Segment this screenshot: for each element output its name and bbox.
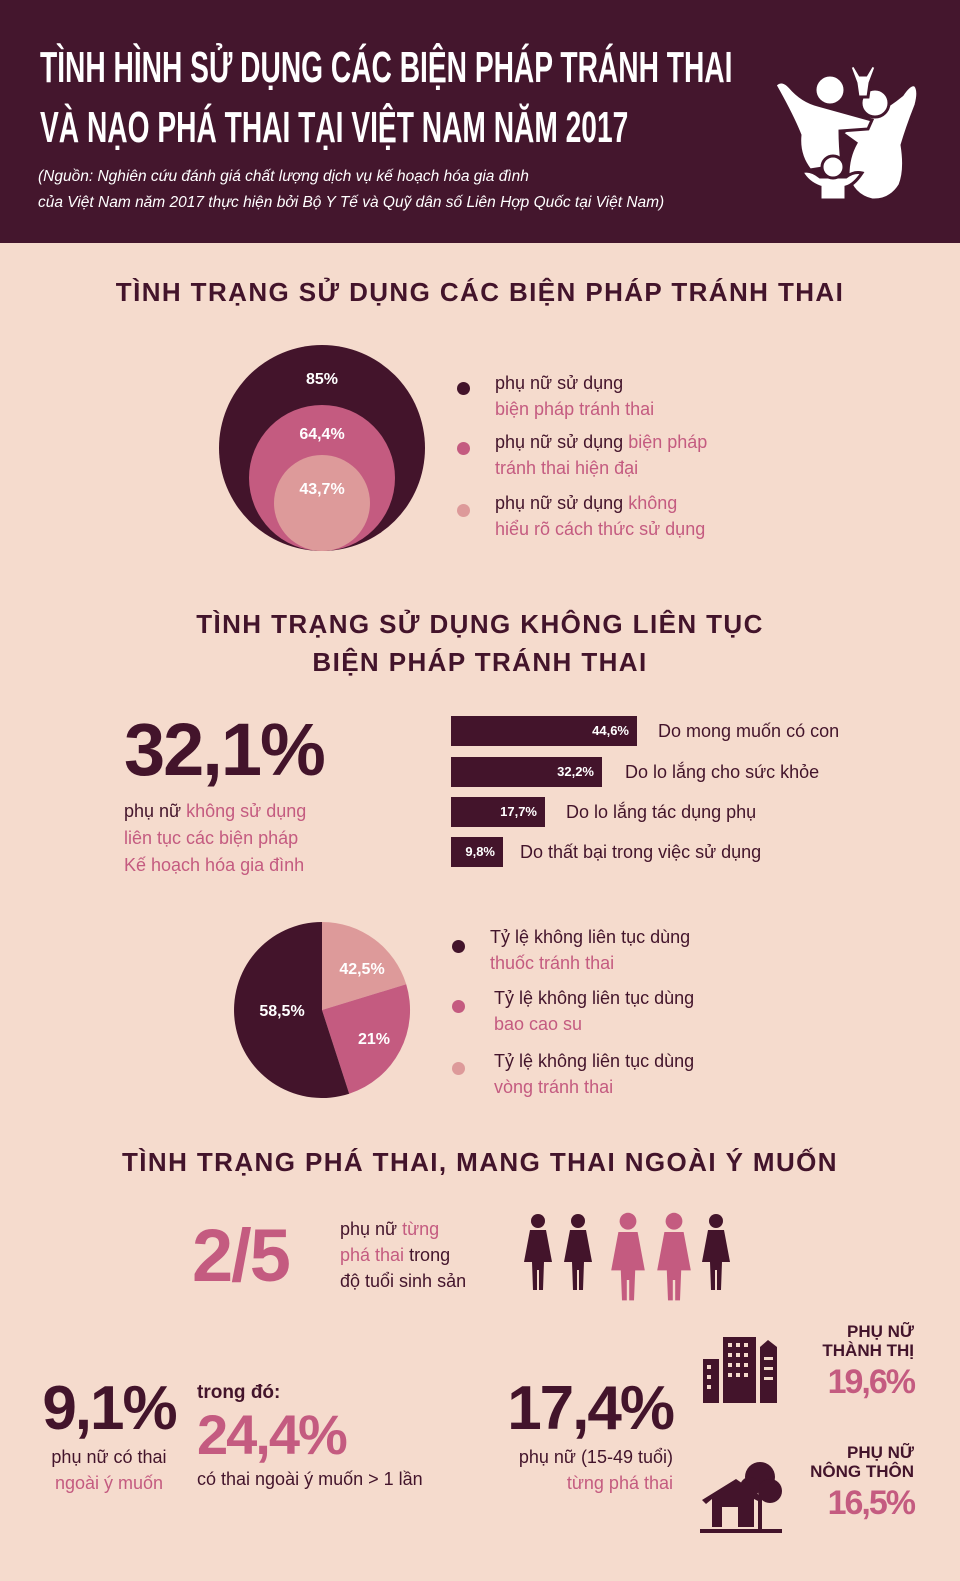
legend: pie: thuốc tránh thai	[490, 953, 614, 973]
stat: 32,1%	[124, 708, 324, 875]
stat: 24,4%: 24,4%	[197, 1403, 346, 1466]
source: của Việt Nam năm 2017 thực hiện bởi Bộ Y Tế và Quỹ dân số Liên Hợp Quốc tại Việt Nam)	[38, 194, 664, 211]
chart: nested circles: 64,4%	[299, 426, 345, 443]
legend: pie: Tỷ lệ không liên tục dùng	[490, 927, 690, 947]
stat: 32,1%: phụ nữ không sử dụng	[124, 801, 306, 821]
bar chart: reasons: Do mong muốn có con	[658, 721, 839, 741]
bar chart: reasons: 32,2%	[557, 764, 594, 779]
stat: 24,4%: có thai ngoài ý muốn > 1 lần	[197, 1469, 423, 1489]
source	[38, 168, 664, 211]
legend: pie: bao cao su	[494, 1014, 582, 1034]
legend: circles: phụ nữ sử dụng biện pháp	[495, 432, 707, 452]
legend: circles: phụ nữ sử dụng	[495, 373, 623, 393]
stat: rural: NÔNG THÔN	[810, 1462, 914, 1481]
text: 2/5: độ tuổi sinh sản	[340, 1271, 466, 1291]
stat: 24,4%: trong đó:	[197, 1382, 280, 1403]
legend: pie: Tỷ lệ không liên tục dùng	[494, 1051, 694, 1071]
heading: abortion: TÌNH TRẠNG PHÁ THAI, MANG THAI NGOÀI Ý MUỐN	[122, 1147, 838, 1177]
title: VÀ NẠO PHÁ THAI TẠI VIỆT NAM NĂM 2017	[40, 103, 628, 152]
pie chart	[234, 922, 410, 1098]
bar chart: reasons: 9,8%	[465, 844, 495, 859]
chart: nested circles	[219, 345, 425, 551]
bar chart: reasons: 44,6%	[592, 723, 629, 738]
stat: 17,4%	[507, 1374, 674, 1493]
stat: 9,1%: 9,1%	[42, 1374, 176, 1443]
icon: women	[524, 1212, 730, 1300]
heading: contraception usage: TÌNH TRẠNG SỬ DỤNG CÁC BIỆN PHÁP TRÁNH THAI	[116, 277, 844, 307]
stat: 9,1%: phụ nữ có thai	[51, 1447, 167, 1467]
heading: discontinued usage: TÌNH TRẠNG SỬ DỤNG KHÔNG LIÊN TỤC	[196, 609, 764, 639]
source: (Nguồn: Nghiên cứu đánh giá chất lượng dịch vụ kế hoạch hóa gia đình	[38, 168, 529, 185]
header	[0, 0, 960, 243]
legend: circles: hiểu rõ cách thức sử dụng	[495, 519, 705, 539]
bar chart: reasons: Do thất bại trong việc sử dụng	[520, 842, 761, 862]
heading: discontinued usage	[196, 609, 764, 677]
title	[40, 43, 732, 152]
text: 2/5: phụ nữ từng	[340, 1219, 439, 1239]
text: 2/5	[340, 1219, 466, 1291]
title: TÌNH HÌNH SỬ DỤNG CÁC BIỆN PHÁP TRÁNH THAI	[40, 43, 732, 92]
legend: circles: phụ nữ sử dụng không	[495, 493, 677, 513]
stat: urban: THÀNH THỊ	[822, 1341, 914, 1360]
stat: 2/5: 2/5	[192, 1214, 289, 1297]
stat: rural: 16,5%	[828, 1484, 914, 1522]
stat: rural	[810, 1443, 916, 1522]
stat: 17,4%: 17,4%	[507, 1374, 673, 1443]
icon: rural house	[700, 1462, 782, 1533]
stat: 32,1%: Kế hoạch hóa gia đình	[124, 855, 304, 875]
stat: 9,1%	[42, 1374, 176, 1493]
stat: 32,1%: liên tục các biện pháp	[124, 828, 298, 848]
chart: nested circles: 43,7%	[299, 481, 345, 498]
heading: discontinued usage: BIỆN PHÁP TRÁNH THAI	[312, 647, 648, 677]
stat: urban: PHỤ NỮ	[847, 1322, 914, 1341]
stat: 9,1%: ngoài ý muốn	[55, 1473, 163, 1493]
stat: rural: PHỤ NỮ	[847, 1443, 914, 1462]
legend: pie	[452, 927, 694, 1097]
stat: urban	[822, 1322, 916, 1401]
pie chart: 58,5%	[259, 1003, 305, 1020]
legend: pie: vòng tránh thai	[494, 1077, 613, 1097]
legend: circles: biện pháp tránh thai	[495, 399, 654, 419]
stat: 24,4%	[197, 1382, 423, 1489]
legend: circles: tránh thai hiện đại	[495, 458, 638, 478]
stat: 17,4%: phụ nữ (15-49 tuổi)	[519, 1447, 673, 1467]
text: 2/5: phá thai trong	[340, 1245, 450, 1265]
legend: circles	[457, 373, 707, 539]
icon: city	[703, 1337, 777, 1403]
chart: nested circles: 85%	[306, 371, 338, 388]
icon: family	[777, 67, 916, 198]
bar chart: reasons	[451, 716, 839, 867]
bar chart: reasons: Do lo lắng cho sức khỏe	[625, 762, 819, 782]
stat: 17,4%: từng phá thai	[567, 1473, 673, 1493]
stat: 32,1%: 32,1%	[124, 708, 324, 791]
pie chart: 21%	[358, 1031, 390, 1048]
legend: pie: Tỷ lệ không liên tục dùng	[494, 988, 694, 1008]
pie chart: 42,5%	[339, 961, 385, 978]
stat: urban: 19,6%	[828, 1363, 914, 1401]
bar chart: reasons: 17,7%	[500, 804, 537, 819]
bar chart: reasons: Do lo lắng tác dụng phụ	[566, 802, 756, 822]
